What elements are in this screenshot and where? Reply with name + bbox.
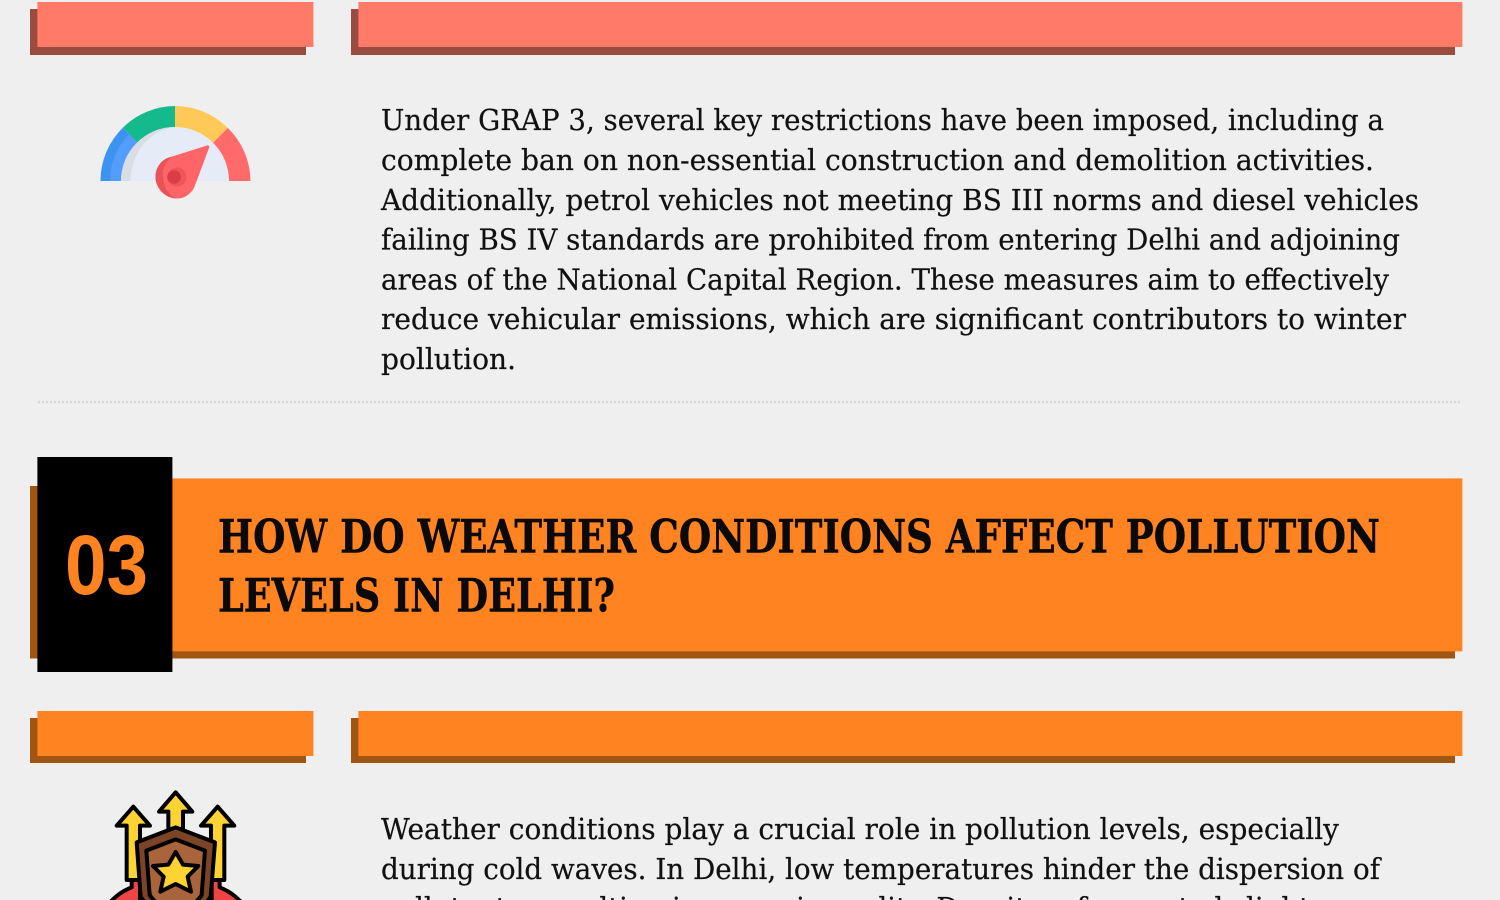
icon: shield with star and rising arrows (108, 792, 243, 900)
heading text: LEVELS IN DELHI? (218, 568, 615, 622)
body text: weather conditions (381, 813, 1382, 900)
body text: GRAP 3 restrictions: Additionally, petrol vehicles not meeting BS III norms and diesel vehicles (380, 184, 1419, 217)
section 03 heading banner (30, 457, 1462, 672)
icon: air quality gauge (100, 106, 251, 199)
body text: weather conditions: during cold waves. In Delhi, low temperatures hinder the dispersion of (381, 853, 1382, 886)
heading text (218, 510, 1380, 622)
right coral sub-header bar (351, 2, 1462, 55)
body text: GRAP 3 restrictions: reduce vehicular emissions, which are significant contributors to winter (381, 303, 1406, 336)
right orange sub-header bar (351, 711, 1462, 763)
number badge 03 (37, 457, 172, 672)
left coral sub-header bar (30, 2, 313, 55)
body text: GRAP 3 restrictions: complete ban on non-essential construction and demolition activities. (381, 144, 1374, 177)
number badge 03: 03 (65, 518, 148, 612)
body text: GRAP 3 restrictions: Under GRAP 3, several key restrictions have been imposed, including a (381, 104, 1384, 137)
left orange sub-header bar (30, 711, 313, 763)
body text: GRAP 3 restrictions: areas of the National Capital Region. These measures aim to effectively (381, 264, 1390, 296)
body text: GRAP 3 restrictions: failing BS IV standards are prohibited from entering Delhi and adjoining (381, 224, 1400, 256)
body text: GRAP 3 restrictions (380, 104, 1419, 376)
body text: GRAP 3 restrictions: pollution. (381, 343, 516, 376)
body text: weather conditions: Weather conditions play a crucial role in pollution levels, especially (381, 813, 1340, 846)
